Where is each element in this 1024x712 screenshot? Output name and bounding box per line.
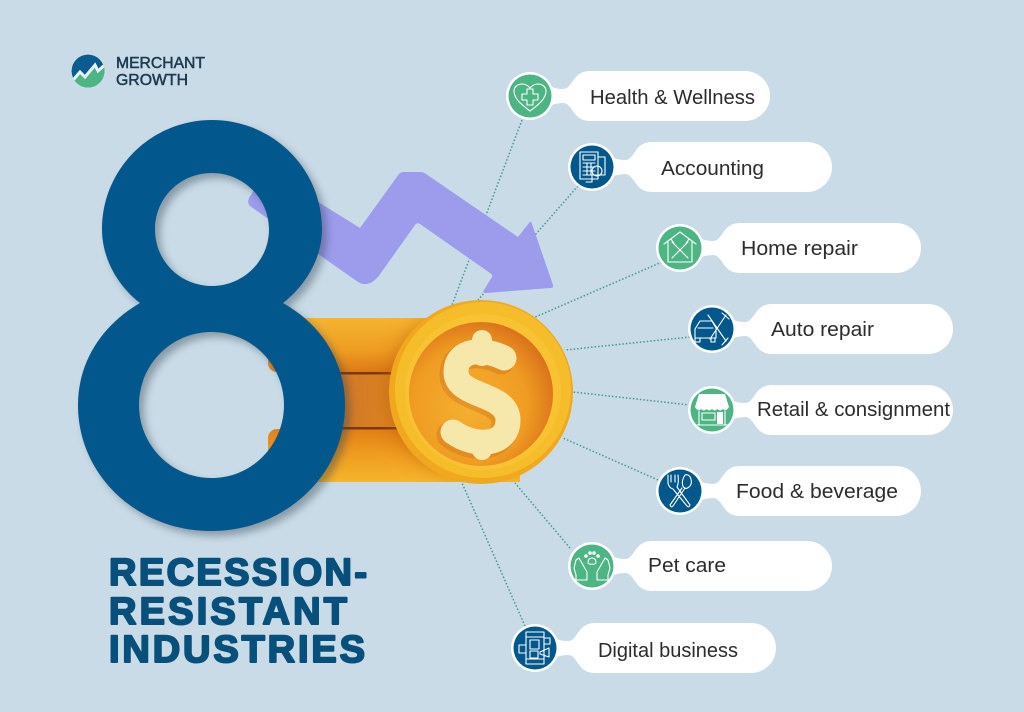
title: RESISTANT bbox=[109, 591, 347, 633]
logo: GROWTH bbox=[116, 72, 188, 89]
item: Pet care bbox=[568, 541, 832, 591]
numeral 8 bbox=[78, 120, 350, 536]
logo bbox=[72, 54, 205, 88]
item: Retail & consignment bbox=[688, 385, 953, 435]
stacked coins bbox=[268, 318, 520, 482]
item: Home repair: Home repair bbox=[741, 238, 858, 260]
connector lines bbox=[452, 120, 690, 626]
item: Food & beverage: Food & beverage bbox=[736, 481, 898, 503]
item: Health & Wellness bbox=[506, 71, 770, 121]
item: Auto repair: Auto repair bbox=[771, 319, 874, 341]
item: Home repair bbox=[656, 223, 921, 273]
item: Auto repair bbox=[688, 304, 953, 354]
title: INDUSTRIES bbox=[109, 629, 365, 671]
main coin with dollar sign bbox=[389, 300, 573, 484]
item: Retail & consignment: Retail & consignment bbox=[757, 399, 950, 421]
item: Food & beverage bbox=[656, 466, 921, 516]
item: Digital business: Digital business bbox=[598, 640, 738, 662]
item: Accounting bbox=[568, 142, 832, 192]
downward arrow bbox=[248, 170, 553, 293]
item: Pet care: Pet care bbox=[648, 555, 726, 577]
item: Digital business bbox=[511, 623, 776, 673]
item: Health & Wellness: Health & Wellness bbox=[590, 87, 755, 109]
item: Accounting: Accounting bbox=[661, 158, 764, 180]
title bbox=[109, 552, 367, 671]
logo: MERCHANT bbox=[116, 55, 206, 72]
title: RECESSION- bbox=[109, 552, 367, 594]
